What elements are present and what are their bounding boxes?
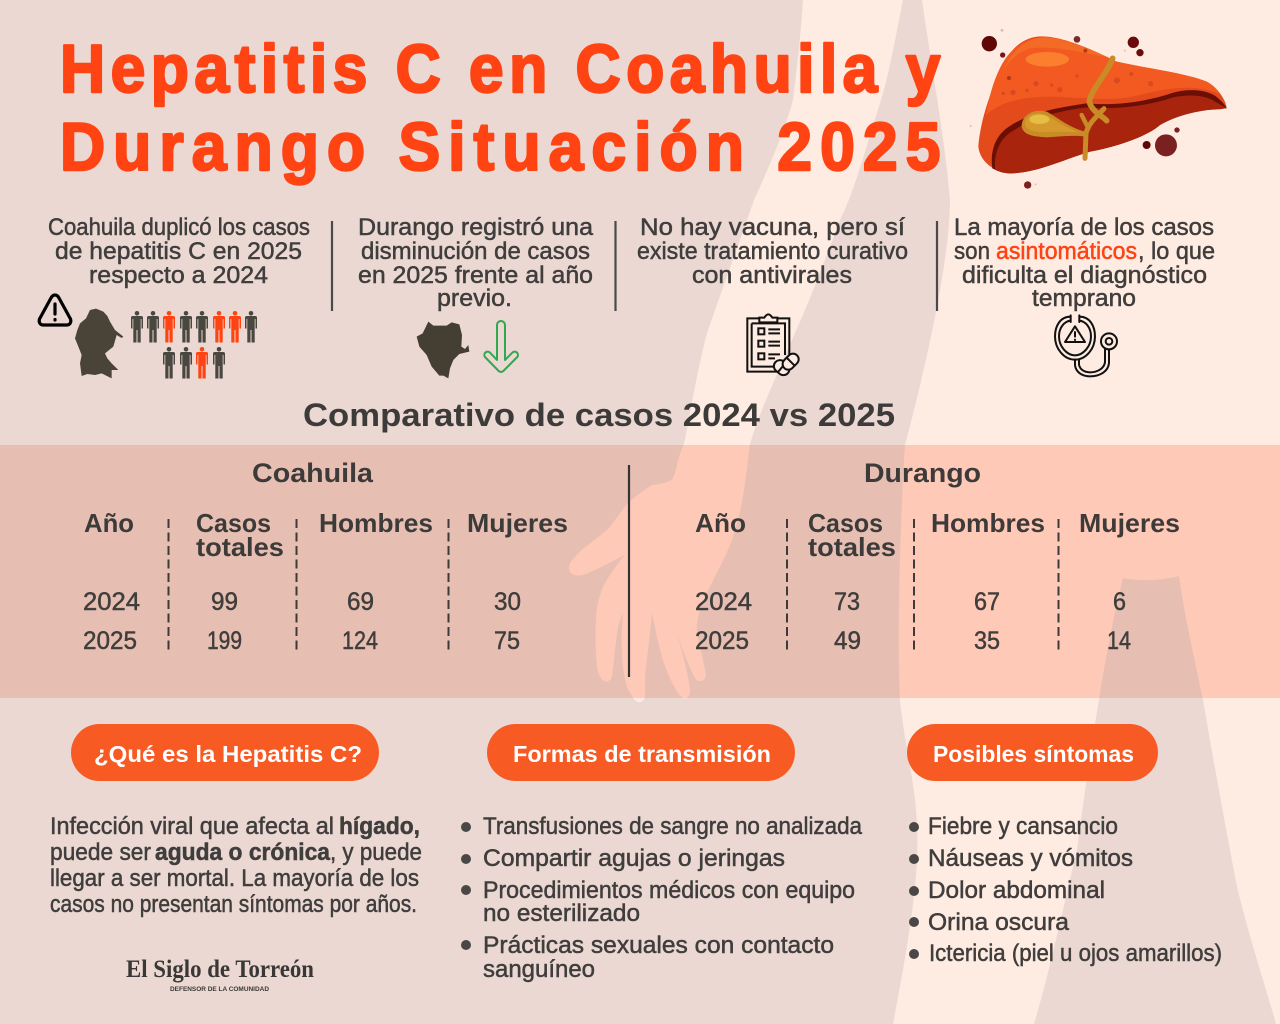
table: Durango — [695, 458, 1180, 655]
fact 3: treatment text: No hay vacuna, pero sí — [640, 214, 905, 241]
pill: symptoms: Posibles síntomas — [933, 741, 1134, 767]
icon: stethoscope with warning — [1055, 315, 1117, 376]
text: definition: llegar a ser mortal. La mayoría de los — [50, 865, 419, 892]
fact 3: treatment text: existe tratamiento curativo — [637, 238, 908, 265]
list: symptoms: Dolor abdominal — [928, 877, 1105, 904]
list: symptoms — [909, 813, 1222, 967]
table: Coahuila — [83, 458, 568, 655]
list: transmission: Procedimientos médicos con equipo — [483, 877, 855, 904]
fact 3: treatment text: con antivirales — [692, 262, 852, 289]
list: transmission: Prácticas sexuales con contacto — [483, 932, 834, 959]
list: transmission: Compartir agujas o jeringas — [483, 845, 785, 872]
icon: warning triangle — [39, 295, 71, 325]
pill: transmission: Formas de transmisión — [513, 741, 771, 767]
table: Coahuila: Mujeres — [467, 508, 568, 538]
text: definition: , y puede — [330, 839, 422, 866]
table: Coahuila: 99 — [211, 588, 238, 616]
logo: El Siglo de Torreón: DEFENSOR DE LA COMUNIDAD — [170, 986, 269, 993]
table: Coahuila: Casos — [196, 508, 271, 538]
table: Durango: Año — [695, 508, 746, 538]
table: Durango: totales — [808, 532, 896, 562]
list: transmission: Transfusiones de sangre no analizada — [483, 813, 863, 840]
pill: transmission — [487, 724, 795, 781]
list: symptoms: Náuseas y vómitos — [928, 845, 1133, 872]
table: Coahuila: 30 — [494, 588, 521, 616]
table: Coahuila: 2025 — [83, 627, 137, 655]
pill: symptoms — [907, 724, 1158, 781]
table: Coahuila: 75 — [494, 627, 520, 655]
table: Coahuila: Hombres — [319, 508, 433, 538]
table: Durango: Casos — [808, 508, 883, 538]
table divider — [628, 465, 630, 677]
fact 2: Durango text: en 2025 frente al año — [358, 262, 593, 289]
list: transmission: sanguíneo — [483, 956, 595, 983]
table: Durango: 35 — [974, 627, 1000, 655]
pill: what is hepatitis C — [71, 724, 379, 781]
text: definition — [50, 813, 422, 918]
text: definition: aguda o crónica — [155, 839, 331, 866]
text: definition: puede ser — [50, 839, 151, 866]
title — [60, 31, 940, 185]
icon: Durango map — [417, 322, 469, 378]
list: symptoms: Orina oscura — [928, 909, 1070, 936]
fact 4: asymptomatic text: , lo que — [1138, 238, 1215, 265]
list: transmission: no esterilizado — [483, 900, 640, 927]
table: Coahuila: Coahuila — [252, 458, 374, 488]
pill: what is hepatitis C: ¿Qué es la Hepatitis C? — [94, 741, 362, 767]
table: Durango: 49 — [834, 627, 861, 655]
table: Durango: Mujeres — [1079, 508, 1180, 538]
table: Coahuila: 199 — [207, 627, 242, 655]
logo: El Siglo de Torreón — [126, 956, 314, 993]
fact 4: asymptomatic text: son — [954, 238, 990, 265]
table: Durango: 2025 — [695, 627, 749, 655]
table: Durango: Durango — [864, 458, 981, 488]
fact 4: asymptomatic text — [954, 214, 1215, 312]
icon: clipboard with pills — [747, 314, 801, 378]
comparison band — [0, 445, 1280, 698]
icon: Coahuila map — [75, 309, 123, 378]
list: symptoms: Fiebre y cansancio — [928, 813, 1118, 840]
table: Coahuila: 124 — [342, 627, 378, 655]
table: Durango: 6 — [1113, 588, 1126, 616]
table: Coahuila: totales — [196, 532, 284, 562]
text: definition: hígado, — [339, 813, 420, 840]
fact 4: asymptomatic text: dificulta el diagnóstico — [962, 262, 1207, 289]
table: Durango: Hombres — [931, 508, 1045, 538]
table: Durango: 67 — [974, 588, 1000, 616]
fact 4: asymptomatic text: temprano — [1032, 285, 1136, 312]
table: Coahuila: 69 — [347, 588, 374, 616]
table: Durango: 73 — [834, 588, 860, 616]
table: Durango: 14 — [1107, 627, 1131, 655]
title: Hepatitis C en Coahuila y — [60, 31, 940, 107]
list: symptoms: Ictericia (piel u ojos amarillos) — [929, 940, 1222, 967]
fact 1: Coahuila text: de hepatitis C en 2025 — [55, 238, 302, 265]
dividers — [332, 221, 937, 311]
fact 2: Durango text: disminución de casos — [361, 238, 590, 265]
fact 1: Coahuila text: Coahuila duplicó los casos — [48, 214, 310, 241]
text: definition: Infección viral que afecta al — [50, 813, 334, 840]
logo: El Siglo de Torreón: El Siglo de Torreón — [126, 956, 314, 983]
table: Durango: 2024 — [695, 588, 752, 616]
table: Coahuila: 2024 — [83, 588, 140, 616]
fact 1: Coahuila text — [48, 214, 310, 289]
fact 4: asymptomatic text: La mayoría de los casos — [954, 214, 1214, 241]
list: transmission — [461, 813, 863, 983]
table: Coahuila: Año — [84, 508, 134, 538]
icon: people count — [131, 311, 257, 378]
fact 2: Durango text: Durango registró una — [358, 214, 594, 241]
fact 2: Durango text: previo. — [437, 285, 512, 312]
icon: liver — [970, 29, 1227, 189]
fact 2: Durango text — [358, 214, 594, 312]
fact 3: treatment text — [637, 214, 908, 289]
fact 1: Coahuila text: respecto a 2024 — [89, 262, 268, 289]
title: Durango Situación 2025 — [60, 109, 940, 185]
heading: comparison: Comparativo de casos 2024 vs 2025 — [303, 397, 895, 433]
icon: green down arrow — [484, 321, 518, 372]
text: definition: casos no presentan síntomas por años. — [50, 891, 417, 918]
fact 4: asymptomatic text: asintomáticos — [996, 238, 1137, 265]
